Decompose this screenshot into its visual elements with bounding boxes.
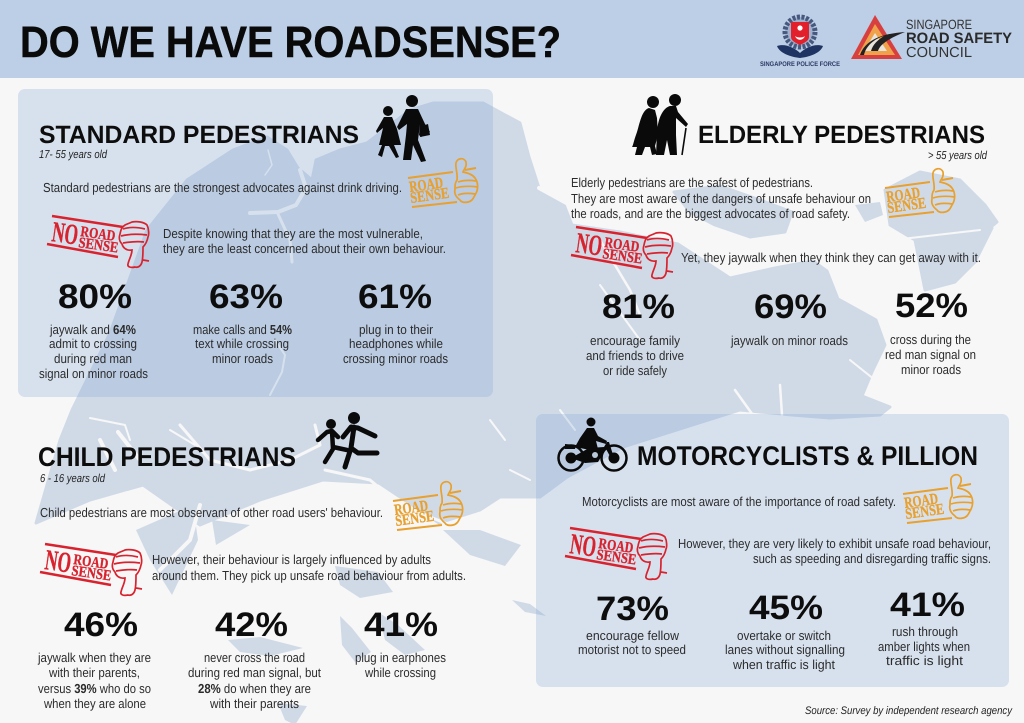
stamp: no road sense <box>571 227 673 278</box>
stat: 42%: never cross the road <box>204 650 305 665</box>
stat: 80%: jaywalk and 64% <box>49 322 136 337</box>
panel: elderly pedestrians <box>571 94 987 378</box>
stat: 81% <box>586 288 684 378</box>
logo: Singapore Road Safety Council: SINGAPORE <box>906 17 972 32</box>
stat: 63%: minor roads <box>212 351 273 366</box>
stamp: no road sense: SENSE <box>70 563 112 585</box>
stamp: no road sense <box>47 216 149 267</box>
stat: 41%: rush through <box>892 624 958 639</box>
stamp: road sense <box>393 482 463 530</box>
stat: 61%: crossing minor roads <box>343 351 448 366</box>
stat: 46%: 46% <box>64 606 138 644</box>
stamp: road sense: SENSE <box>394 508 435 530</box>
panel: standard pedestrians <box>18 89 493 397</box>
stamp: no road sense: SENSE <box>595 547 637 569</box>
stat: 69%: jaywalk on minor roads <box>730 333 848 348</box>
stamp: road sense <box>885 169 955 217</box>
logo: Singapore Road Safety Council: COUNCIL <box>906 45 972 61</box>
statement: However, their behaviour is largely influenced by adults <box>152 552 431 567</box>
statement: Motorcyclists are most aware of the importance of road safety. <box>582 494 896 509</box>
stamp: road sense: SENSE <box>904 501 945 523</box>
stat: 52%: 52% <box>895 287 968 325</box>
stat: 63%: make calls and 54% <box>193 322 292 337</box>
stamp: road sense <box>903 475 973 523</box>
stat: 46%: when they are alone <box>43 696 146 711</box>
stat: 81%: and friends to drive <box>586 348 684 363</box>
panel: motorcyclists and pillion <box>536 414 1009 687</box>
statement: Despite knowing that they are the most vulnerable, <box>163 226 423 241</box>
stamp: road sense: ROAD <box>885 184 921 206</box>
stat: 61%: 61% <box>358 278 432 316</box>
stat: 41%: 41% <box>890 586 965 624</box>
panel: child pedestrians <box>37 412 466 711</box>
statement: such as speeding and disregarding traffic signs. <box>753 551 991 566</box>
stat: 45% <box>725 589 845 672</box>
stat: 45%: lanes without signalling <box>725 642 845 657</box>
stat: 46%: jaywalk when they are <box>37 650 151 665</box>
statement: they are the least concerned about their own behaviour. <box>163 241 446 256</box>
stat: 42%: with their parents <box>209 696 299 711</box>
stat: 80% <box>39 278 148 381</box>
logo: Singapore Road Safety Council <box>851 15 1012 61</box>
stamp: no road sense: ROAD <box>79 224 116 245</box>
stat: 52%: minor roads <box>901 362 961 377</box>
logo: Singapore Police Force <box>760 17 841 68</box>
heading: child pedestrians: CHILD PEDESTRIANS <box>38 442 296 472</box>
stat: 46% <box>37 606 151 711</box>
stat: 46%: with their parents, <box>48 665 140 680</box>
stat: 73%: 73% <box>596 590 669 628</box>
stat: 46%: versus 39% who do so <box>38 681 151 696</box>
stat: 42%: 28% do when they are <box>198 681 311 696</box>
stat: 73% <box>578 590 686 657</box>
statement: around them. They pick up unsafe road behaviour from adults. <box>152 568 466 583</box>
stat: 42%: 42% <box>215 606 288 644</box>
stat: 52%: cross during the <box>890 332 971 347</box>
statement: Elderly pedestrians are the safest of pedestrians. <box>571 175 813 190</box>
main title: DO WE HAVE ROADSENSE? <box>20 18 561 67</box>
stamp: no road sense <box>40 544 142 595</box>
age range: 17- 55 years old <box>39 149 107 161</box>
stat: 81%: 81% <box>602 288 675 326</box>
icon: motorcyclist <box>558 418 626 470</box>
statement: Child pedestrians are most observant of other road users' behaviour. <box>40 505 383 520</box>
stat: 80%: admit to crossing <box>49 336 137 351</box>
stat: 61%: headphones while <box>349 336 443 351</box>
stat: 69%: 69% <box>754 288 827 326</box>
stat: 45%: 45% <box>749 589 823 627</box>
stamp: no road sense: SENSE <box>77 235 119 257</box>
stat: 41% <box>355 606 446 680</box>
stat: 63% <box>193 278 292 366</box>
logo: Singapore Road Safety Council: ROAD SAFETY <box>906 30 1012 47</box>
stat: 42% <box>188 606 321 711</box>
statement: the roads, and are the biggest advocates of road safety. <box>571 206 850 221</box>
stat: 41%: traffic is light <box>886 653 963 668</box>
icon: adult and child walking <box>376 95 430 162</box>
stat: 81%: or ride safely <box>603 363 667 378</box>
heading: standard pedestrians: STANDARD PEDESTRIANS <box>39 121 359 149</box>
stat: 73%: encourage fellow <box>586 628 680 643</box>
heading: elderly pedestrians: ELDERLY PEDESTRIANS <box>698 121 985 149</box>
icon: elderly couple with cane <box>632 94 688 155</box>
stat: 61%: plug in to their <box>359 322 434 337</box>
stamp: road sense: SENSE <box>409 185 450 207</box>
stat: 41%: amber lights when <box>878 639 970 654</box>
stamp: no road sense: ROAD <box>603 235 640 256</box>
stat: 69% <box>730 288 848 348</box>
stat: 45%: overtake or switch <box>737 628 831 643</box>
stat: 42%: during red man signal, but <box>188 665 321 680</box>
statement: Standard pedestrians are the strongest advocates against drink driving. <box>43 180 402 195</box>
stat: 80%: during red man <box>54 351 132 366</box>
stat: 52%: red man signal on <box>885 347 976 362</box>
stat: 80%: 80% <box>58 278 132 316</box>
logo: Singapore Police Force: SINGAPORE POLICE FORCE <box>760 61 841 68</box>
stamp: no road sense: NO <box>50 216 80 252</box>
stat: 41%: plug in earphones <box>355 650 446 665</box>
stamp: no road sense: NO <box>574 227 604 263</box>
age range: 6 - 16 years old <box>40 473 105 485</box>
stat: 45%: when traffic is light <box>732 657 835 672</box>
stat: 80%: signal on minor roads <box>39 366 148 381</box>
stamp: no road sense: ROAD <box>597 536 634 557</box>
stat: 63%: text while crossing <box>195 336 289 351</box>
stat: 41% <box>878 586 970 668</box>
stamp: road sense: ROAD <box>393 497 429 519</box>
stat: 41%: while crossing <box>364 665 436 680</box>
stat: 41%: 41% <box>364 606 438 644</box>
stat: 61% <box>343 278 448 366</box>
stamp: no road sense: NO <box>568 528 598 564</box>
header bar <box>0 0 1024 78</box>
stamp: no road sense <box>565 528 667 579</box>
heading: motorcyclists and pillion: MOTORCYCLISTS & PILLION <box>637 441 978 471</box>
stamp: road sense <box>408 159 478 207</box>
statement: They are most aware of the dangers of unsafe behaviour on <box>571 191 871 206</box>
stat: 81%: encourage family <box>590 333 680 348</box>
stamp: no road sense: NO <box>43 544 73 580</box>
icon: two children running <box>318 412 377 467</box>
stat: 52% <box>885 287 976 377</box>
stat: 63%: 63% <box>209 278 283 316</box>
age range: > 55 years old <box>928 150 987 162</box>
stat: 73%: motorist not to speed <box>578 642 686 657</box>
stamp: road sense: ROAD <box>408 174 444 196</box>
stamp: road sense: ROAD <box>903 490 939 512</box>
statement: Yet, they jaywalk when they think they can get away with it. <box>681 250 981 265</box>
stamp: no road sense: SENSE <box>601 246 643 268</box>
stamp: no road sense: ROAD <box>72 552 109 573</box>
stamp: road sense: SENSE <box>886 195 927 217</box>
